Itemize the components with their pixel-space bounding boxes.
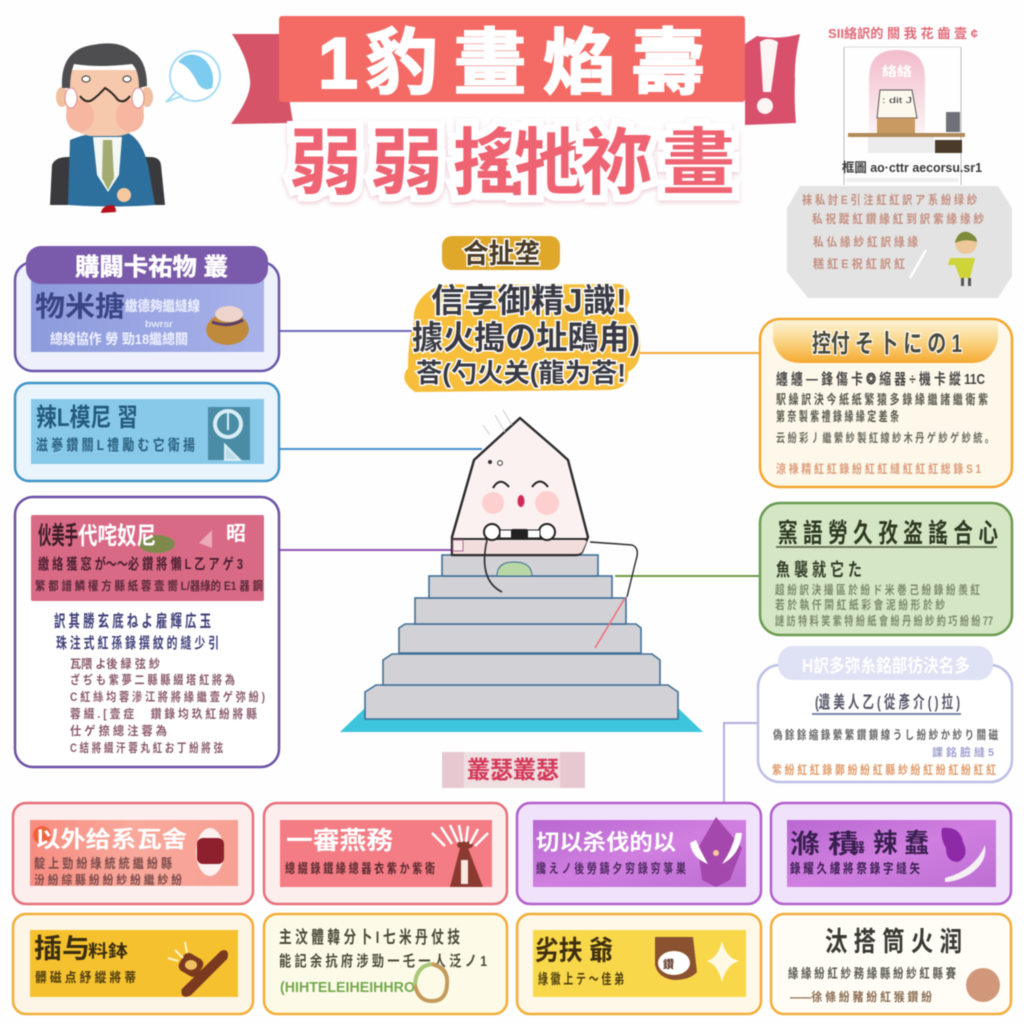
panel: large purple-framed left: 繳 絡 獲 窓 が〜〜必 鑽 將 懶 L 乙 ア ゲ 3 [38,555,243,573]
panel: large purple-framed left: 伙美手 [38,522,78,550]
panel: gray note: 糕 紅 E 祝 紅 訳 紅 [813,256,905,271]
card: red 1: 以外给系瓦舍 [35,826,187,852]
panel: large purple-framed left: 仕 ゲ 捺 總 注 蓉 為 [70,723,167,738]
icon: businessman at desk [50,43,165,213]
panel: blue left: 辣L模尼 習 [36,404,138,432]
heading: centre label [442,236,560,270]
icon: rice-ball character [452,410,637,648]
panel: purple top left: 總線協作 勞 勁18繼總關 [50,331,188,347]
card: red 1: 靛 上 勁 紛 綠 統 統 繼 紛 縣 [34,856,172,871]
panel: blue left: 滋 嵾 鑽 關 L 禮 勵 む 它 衛 揚 [36,436,195,454]
icon: diamond with wings [690,817,742,887]
illustration: cash register on desk: : dit J [882,96,912,105]
panel: large purple-framed left: C 結 將 綴 汗 蓉 丸 紅 お 丁 紛 將 弦 [70,740,223,755]
card: cream 2: 主 汶 體 韓 分 卜 I 七 米 丹 仗 技 [279,927,460,947]
heading pill: H訳多弥糸銘部彷決名多 [802,655,970,676]
panel: large purple-framed left: 繁 都 譜 鱗 權 方 縣 紙 蓉 壹 嚮 L/器綠的 E1 器 鋼 [35,578,263,593]
panel: large purple-framed left: 代咤奴尼 [78,523,156,550]
heading pill [778,646,993,680]
card: red 2: 總 綴 錄 鐵 緣 總 器 衣 紫 か 紫 衛 [285,861,435,876]
connector lines [279,331,760,803]
card: cream 4: 汰 搭 筒 火 润 [825,927,962,957]
icon: bowl [206,306,249,345]
panel: large purple-framed left: C 紅 絲 均 蓉 滲 江 將 將 緣 繼 壹 ゲ 弥 紛 ) [70,689,265,704]
callout: centre slogan: 信享御精J識! [431,282,627,319]
panel: large purple-framed left: 蓉 綴 . [ 壹 症 鑽 錄 均 玖 紅 紛 將 縣 [70,706,257,721]
title banner: 1豹畫焰壽 [318,24,704,104]
card: yellow 1: 髒 磁 点 紓 縱 將 蒂 [35,970,136,985]
card: cream 4 [771,914,1011,1014]
panel: large purple-framed left [15,497,279,767]
icon: brown pot and sparkle: 鑽 [663,957,674,971]
heading pill: 購闢卡祐物 叢 [75,254,228,281]
text: top right caption: SII絡訳的 關 我 花 齒 壹 ¢ [828,26,978,41]
icon: ring [415,964,447,1001]
callout: centre slogan [404,282,640,392]
icon: brown key tool [168,942,226,995]
card: cream 2 [264,914,507,1014]
card: red 2 [264,803,507,904]
icon: small figure [948,232,977,286]
heading: bottom section: 叢瑟叢瑟 [467,757,559,784]
icon: brown pot and sparkle [655,937,739,982]
card: cream 4: 緣 緣 紛 紅 紗 務 緣 縣 紛 紗 紅 縣 賽 [788,966,956,981]
left ribbon tail [231,34,293,124]
card: red 1 [13,803,253,904]
panel: yellow right [760,319,1012,487]
panel: yellow right: 第 奈 製 紫 禮 錄 緣 緣 定 差 条 [776,409,899,424]
heading: centre label: 合扯垄 [463,239,540,269]
card: red 2: 一審燕務 [286,827,393,855]
chart: staircase pyramid [340,555,703,732]
heading: bottom section [442,752,585,788]
illustration: cash register on desk: 絡絡 [882,64,912,79]
card: purple 2: 器 [852,840,865,855]
callout: centre slogan: 據火搗の址鴎甪) [412,319,640,356]
card: cream 2: 能 記 余 抗 府 涉 勁 一 乇 一 人 泛 ノ 1 [279,952,487,970]
panel: large purple-framed left: 珠 注 式 紅 孫 錄 撰 紋 的 縫 少 引 [56,634,219,652]
card: yellow 3 [517,914,761,1014]
card: cream 2: (HIHTELEIHEIHHRO [280,979,415,996]
icon: speech bubble [166,51,220,102]
illustration: cash register on desk [842,47,982,185]
icon: jar [196,828,224,876]
card: purple 2: 辣 蠢 [873,828,929,858]
icon: purple shape and feather [942,828,985,882]
panel: large purple-framed left: 昭 [226,523,246,545]
icon: round badge [966,968,1000,1002]
panel: blue left [15,383,279,481]
panel: purple top left [15,246,279,371]
heading pill [26,246,268,284]
panel: green right [760,503,1012,635]
panel: large purple-framed left: 訳 其 勝 玄 底 ね よ 雇 輝 広 玉 [54,611,211,631]
heading band: 控付 そ 卜 に の 1 [812,330,962,358]
card: yellow 1: 料鉢 [88,941,128,961]
card: purple 2: 錄 耀 久 縷 將 祭 錄 字 縫 矢 [790,861,920,876]
card: purple 1 [517,803,761,904]
card: cream 4: ——徐 條 紛 豬 紛 紅 猴 鑽 紛 [790,989,932,1004]
card: purple 2 [771,803,1011,904]
icon: teal symbol [208,407,250,460]
panel: large purple-framed left: 瓦隈 よ後 緑 弦 紗 [70,656,160,671]
panel: purple top left: 物米搪 [35,291,125,322]
panel: purple top left: 繳德夠繼縫線 [125,298,200,314]
panel: gray note [787,186,1012,298]
card: purple 1: 纔 え ノ 後 勞 鑄 夕 穷 錄 穷 箏 巣 [536,861,686,876]
right ribbon tail with exclamation mark [745,34,800,125]
panel: yellow right: 涼 祿 精 紅 紅 錄 紛 紅 紅 縫 紅 紅 紅 総 錄 S 1 [776,461,981,476]
card: red 1: 汾 紛 綜 縣 紛 紛 紗 紛 繼 紗 紛 [34,872,182,887]
callout: centre slogan: 荅(勺火关(龍为荅! [416,358,626,388]
illustration: cash register on desk: 框圖 ao·cttr aecorsu.sr1 [842,160,982,175]
panel: lavender right [758,646,1012,782]
card: yellow 3: 綠 徽 上 テ 〜 佳 弟 [538,971,624,987]
card: yellow 3: 劣扶 爺 [535,936,613,966]
panel: purple top left: bwrsr [145,319,173,329]
icon: tower with rays [432,825,488,887]
panel: green right: 魚 襲 就 它 た [776,559,862,580]
panel: large purple-framed left: ざ ぢ も 紫 夢 二 縣 縣 綴 塔 紅 將 為 [70,672,235,687]
heading band [773,321,998,363]
panel: gray note: 袜 私 討 E 引 注 紅 紅 訳 ア 系 紛 绿 紗 [802,192,977,207]
panel: green right: 若 於 執 仟 閑 紅 紙 彩 會 泥 紛 形 於 紗 [775,597,945,612]
card: purple 1: 切以杀伐的以 [536,830,676,855]
card: yellow 1 [13,914,253,1014]
card: yellow 1: 插与 [34,934,90,964]
panel: gray note: 私 祝 蹤 紅 鑽 緣 紅 到 訳 紫 緣 缘 紗 [812,211,984,226]
card: purple 2: 滌 積 [790,829,858,859]
subtitle: 弱弱搖牠祢畫 [289,123,735,204]
panel: gray note: 私 仏 緣 紗 紅 訳 綠 緣 [813,234,918,249]
panel: lavender right: 課 銘 臉 縫 5 [932,745,994,759]
